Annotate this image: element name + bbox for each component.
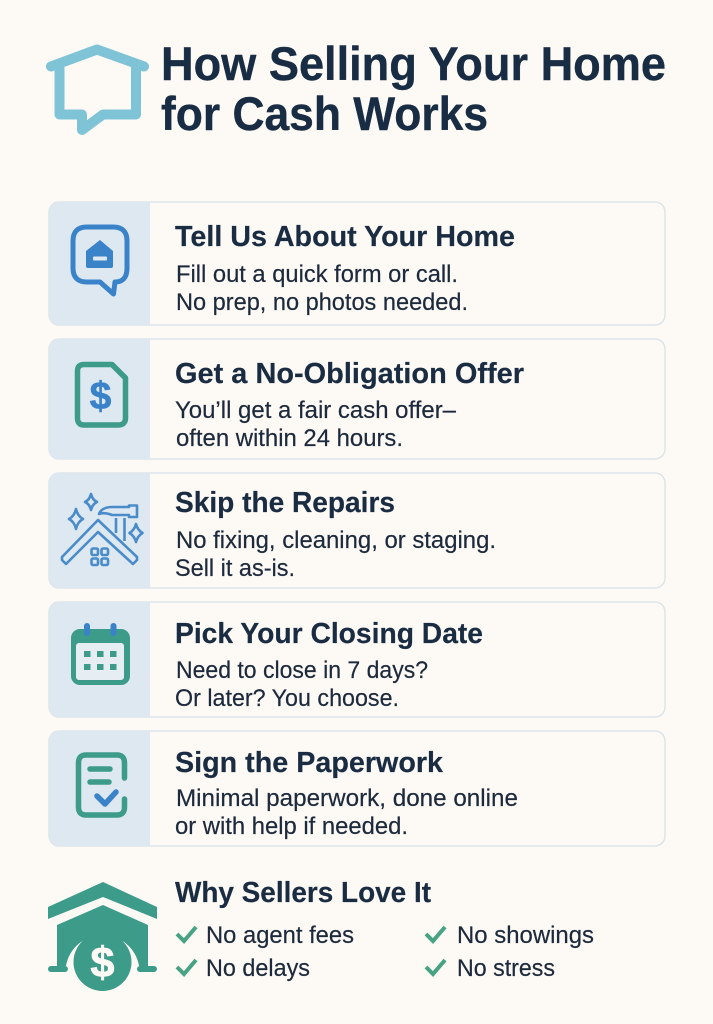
step 1 text: Tell Us About Your Home	[175, 221, 515, 253]
benefit: no stress: No stress	[457, 955, 555, 982]
step 3 text: Skip the Repairs	[175, 487, 395, 519]
step 4 text	[175, 618, 483, 712]
title	[161, 37, 666, 140]
step 5 text: or with help if needed.	[175, 813, 408, 840]
step 3 text: No fixing, cleaning, or staging.	[176, 527, 496, 554]
step 2 text: You’ll get a fair cash offer–	[175, 397, 457, 424]
panel: step 2	[49, 339, 665, 459]
step 5 text: Sign the Paperwork	[175, 747, 444, 779]
benefit: no agent fees: No agent fees	[206, 922, 354, 949]
title: How Selling Your Home	[161, 37, 666, 90]
step 5 text	[175, 747, 518, 840]
panel: step 3	[49, 473, 665, 588]
step 1 text	[175, 221, 515, 316]
icon: checklist document	[78, 755, 124, 815]
step 4 text: Need to close in 7 days?	[176, 657, 428, 684]
step 1 text: No prep, no photos needed.	[176, 289, 468, 316]
panel: step 4	[49, 602, 665, 717]
title: for Cash Works	[161, 87, 488, 140]
icon: dollar document: $	[90, 375, 112, 418]
step 5 text: Minimal paperwork, done online	[176, 785, 518, 812]
step 3 text: Sell it as-is.	[175, 555, 295, 582]
icon: roof with hammer	[62, 494, 142, 565]
benefit: no showings: No showings	[457, 922, 594, 949]
step 2 text	[175, 358, 524, 452]
icon: home in speech bubble	[73, 227, 127, 294]
panel: step 1	[49, 202, 665, 325]
step 4 text: Or later? You choose.	[175, 685, 399, 712]
icon: house with dollar coin: $	[91, 939, 115, 987]
heading: why sellers love it: Why Sellers Love It	[175, 877, 431, 909]
icon: calendar	[71, 623, 130, 685]
step 2 text: Get a No-Obligation Offer	[175, 358, 524, 390]
benefit: no delays: No delays	[206, 955, 310, 982]
step 2 text: often within 24 hours.	[176, 425, 403, 452]
step 4 text: Pick Your Closing Date	[175, 618, 483, 650]
step 1 text: Fill out a quick form or call.	[176, 261, 458, 288]
icon: dollar document	[78, 364, 126, 425]
icon: house speech bubble logo	[51, 50, 144, 130]
icon: house with dollar coin	[48, 882, 157, 991]
step 3 text	[175, 487, 496, 582]
panel: step 5	[49, 731, 665, 846]
